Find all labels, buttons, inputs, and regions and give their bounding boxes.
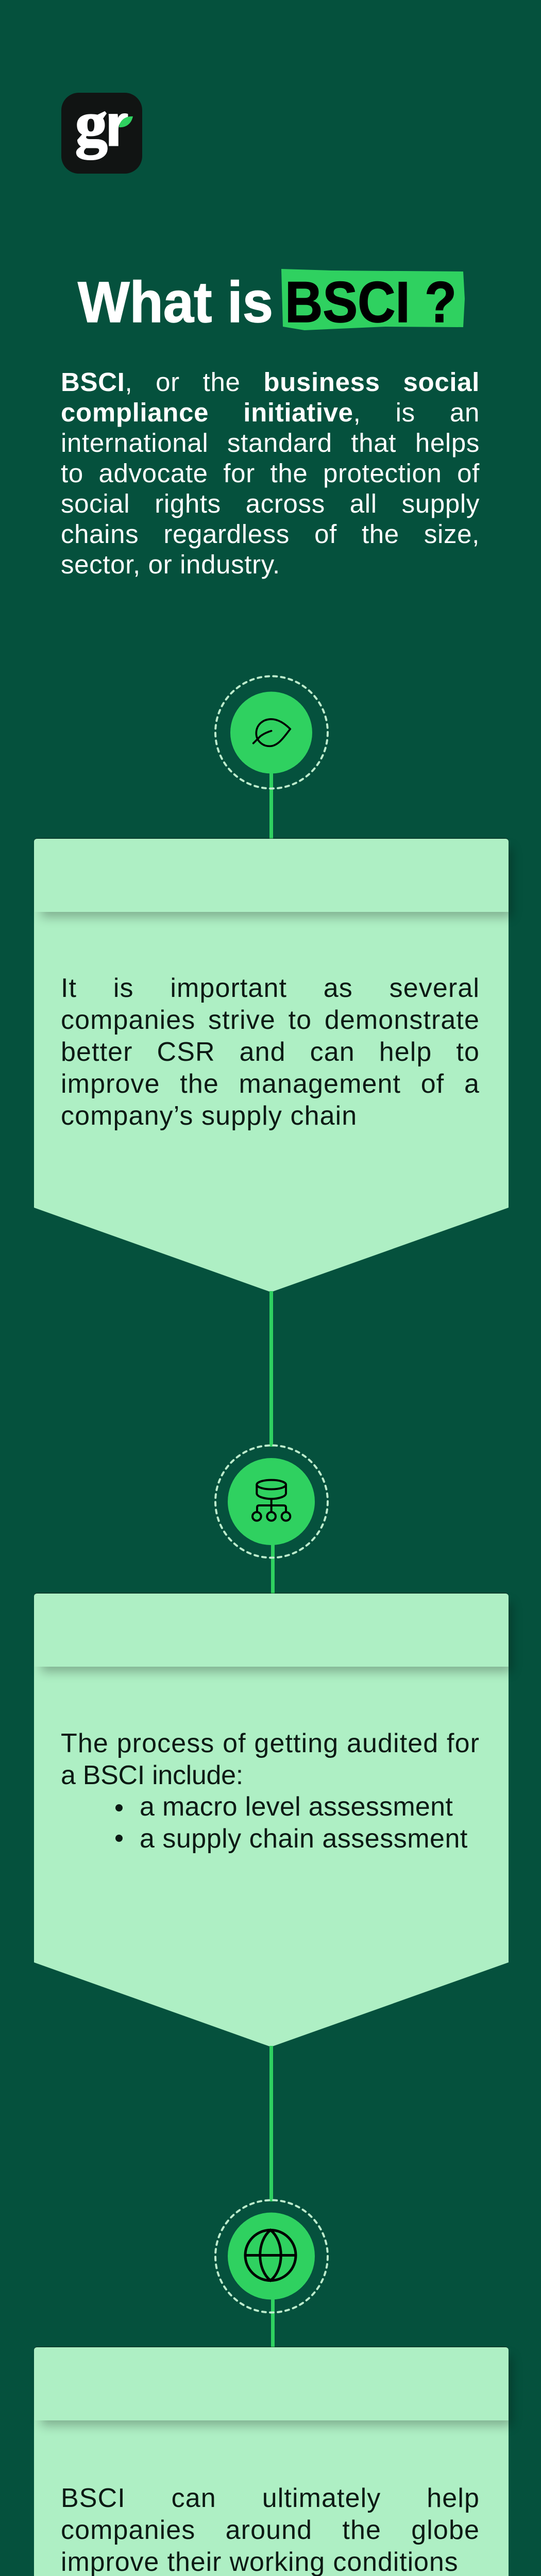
bullet item: supply chain: a supply chain assessment — [140, 1824, 468, 1854]
bullet item: macro level: a macro level assessment — [140, 1792, 453, 1822]
card 3 text: companies around the globe — [61, 2515, 480, 2545]
title: What is BSCI?: BSCI ? — [285, 270, 457, 334]
intro text block: chains regardless of the size, — [61, 519, 480, 549]
icon: leaf — [214, 675, 329, 789]
card 1 text: companies strive to demonstrate — [61, 1005, 480, 1035]
panel: card 3 — [34, 2346, 513, 2576]
title: What is BSCI?: What is — [78, 270, 273, 334]
intro text block: compliance initiative, is an — [61, 398, 480, 427]
card 1 text: company’s supply chain — [61, 1101, 357, 1131]
icon: globe — [214, 2199, 329, 2313]
title: What is BSCI? — [77, 269, 465, 334]
card 3 text: BSCI can ultimately help — [61, 2483, 480, 2513]
connector: leaf icon to card 1 — [269, 770, 273, 839]
card 3 body shape — [34, 2347, 509, 2576]
intro text block — [61, 367, 480, 579]
card 2 text — [61, 1728, 480, 1854]
card 3 flap — [34, 2347, 509, 2420]
card 1 text — [61, 973, 480, 1131]
intro text block: BSCI, or the business social — [61, 367, 480, 397]
panel: card 2 — [34, 1593, 513, 2046]
card 1 text: better CSR and can help to — [61, 1037, 480, 1067]
logo badge — [61, 93, 142, 174]
logo badge: r — [106, 93, 128, 158]
connector: network icon to card 2 — [271, 1543, 275, 1594]
card 2 text: a BSCI include: — [61, 1760, 243, 1790]
intro text block: social rights across all supply — [61, 489, 480, 518]
connector: globe icon to card 3 — [271, 2298, 275, 2348]
intro text block: to advocate for the protection of — [61, 459, 480, 488]
card 1 body shape — [34, 839, 509, 1292]
card 3 text — [61, 2483, 480, 2576]
panel: card 1 — [34, 838, 513, 1292]
connector: card 1 to network icon — [269, 1291, 273, 1447]
card 1 flap — [34, 839, 509, 912]
icon: network — [214, 1445, 329, 1559]
card 1 text: It is important as several — [61, 973, 480, 1003]
connector: card 2 to globe icon — [269, 2046, 273, 2201]
card 2 text: The process of getting audited for — [61, 1728, 480, 1758]
intro text block: international standard that helps — [61, 428, 480, 457]
card 1 text: improve the management of a — [61, 1069, 480, 1099]
intro text block: sector, or industry. — [61, 550, 280, 579]
card 2 flap — [34, 1594, 509, 1667]
card 2 body shape — [34, 1594, 509, 2046]
